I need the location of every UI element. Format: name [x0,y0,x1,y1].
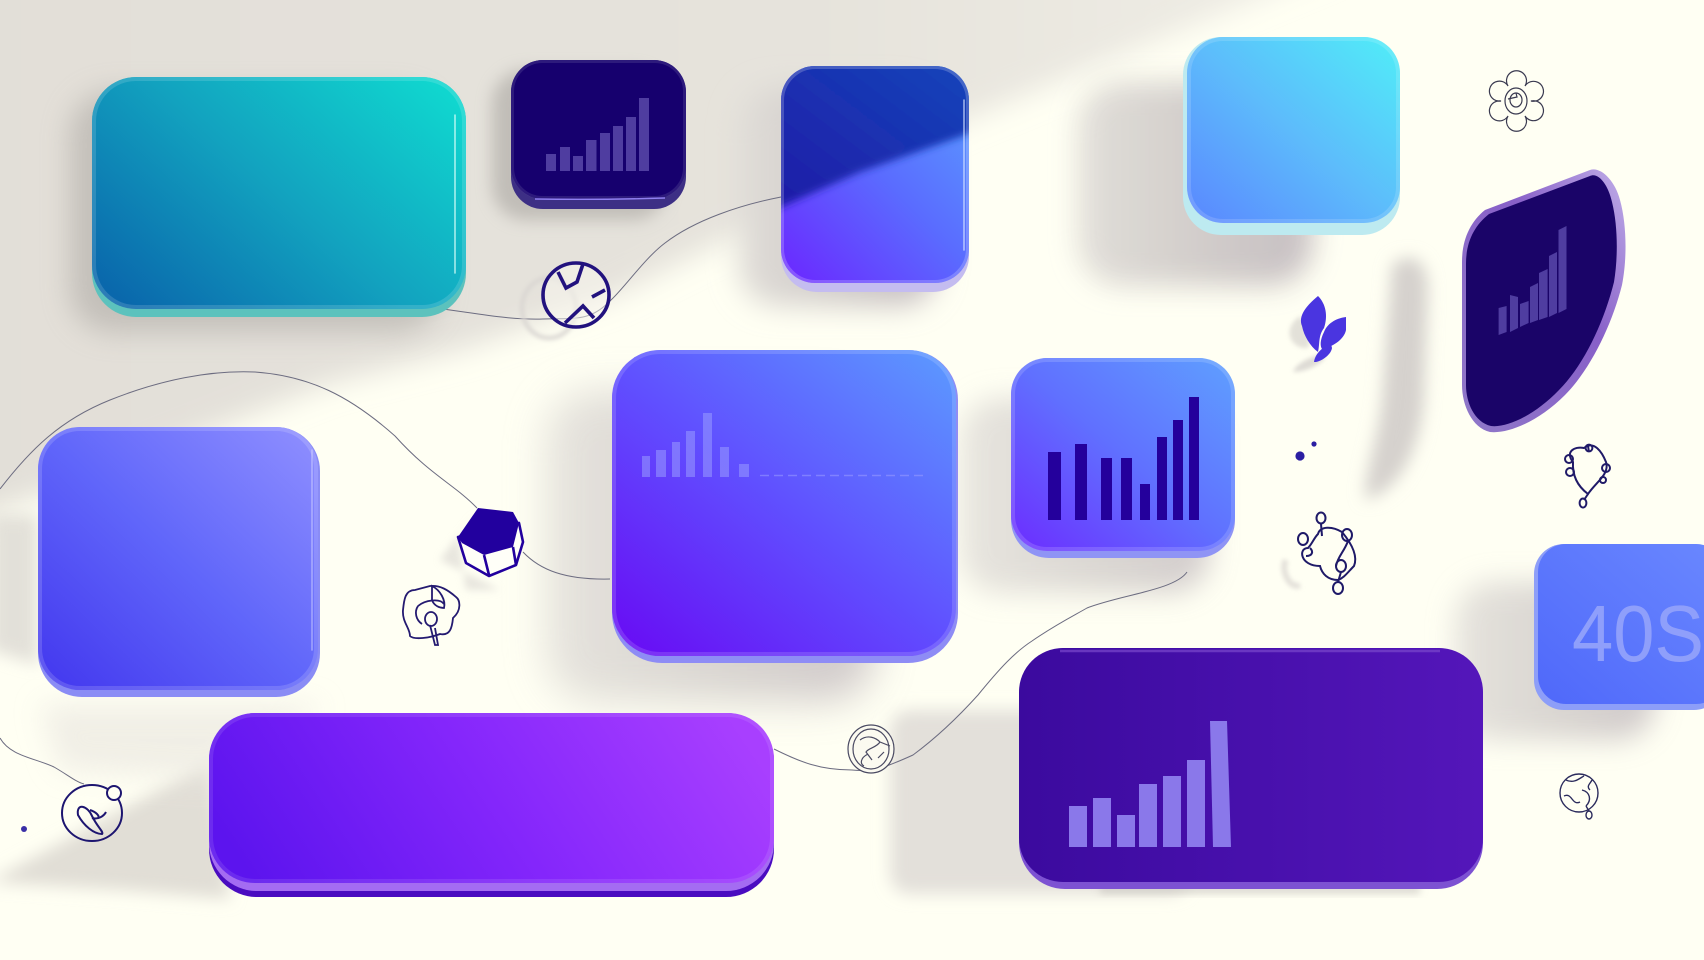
panel: cyan [1183,37,1400,235]
panel: blue with dark bar chart [1011,358,1235,558]
icon: dots [1295,441,1317,461]
panel: blue with diagonal light [781,66,969,292]
panel shadows [70,70,1655,894]
icon: circle with figure [62,785,122,841]
panel: central blue with faint chart [612,350,958,663]
icon: hexagon [440,508,523,590]
icon: leaves [1290,296,1346,372]
panel: navy with bar chart [511,60,686,209]
panel: blue 40S [1534,544,1704,710]
connector lines [0,197,1187,784]
icon: tiny dot left [21,826,27,832]
panel: periwinkle left [38,427,320,697]
icon: knot [403,586,459,645]
panel: purple wide [209,713,774,897]
icon: globe wheel [522,263,609,338]
panel: dark shield with bar chart [1462,169,1626,432]
icon: flower [1489,71,1543,131]
icon: network centre [1284,512,1355,594]
panel: dark purple with bar chart [1019,648,1483,889]
panel: teal [92,77,466,317]
bar chart: faint [642,413,926,477]
bar chart: dark bars [1048,397,1199,520]
icon: network right [1565,445,1610,508]
bar chart: shield [1499,226,1566,335]
icon: small globe [1560,774,1598,819]
bar chart: lilac [1069,721,1231,847]
bar chart: navy [546,98,649,171]
icon: tiny globe [848,725,894,773]
